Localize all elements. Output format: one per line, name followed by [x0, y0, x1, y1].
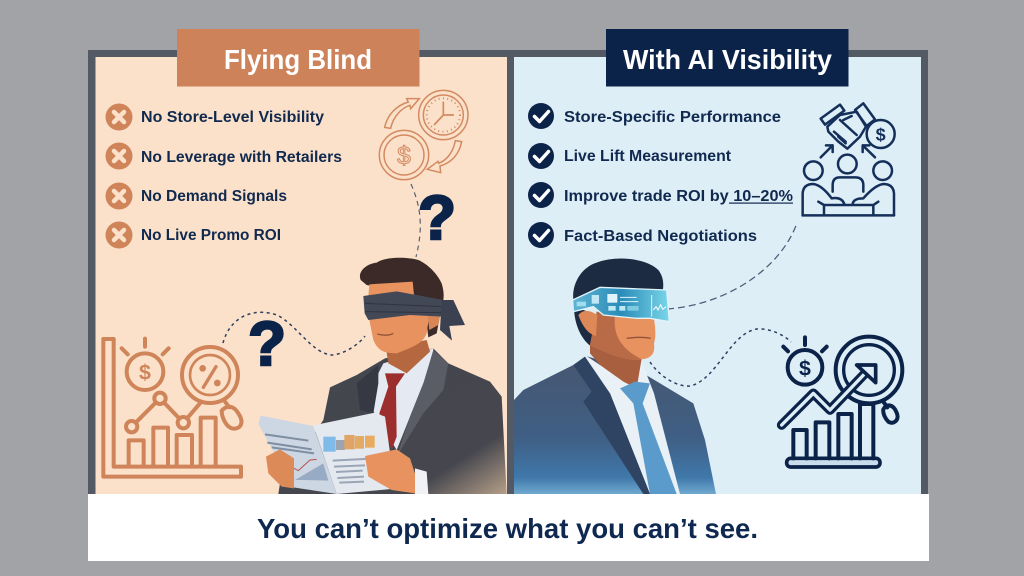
- lapels: [397, 350, 448, 457]
- left checklist: [106, 104, 342, 248]
- item: improve trade ROI: Improve trade ROI by 10–20%: [564, 188, 793, 205]
- item: no demand signals: [106, 182, 287, 210]
- item: live lift measurement: Live Lift Measurement: [564, 148, 732, 165]
- item: fact-based negotiations: [528, 222, 757, 248]
- dotted connector: man to chart: [650, 329, 791, 386]
- right header: [606, 29, 848, 86]
- item: store-specific performance: [528, 103, 781, 129]
- item: live lift measurement: [528, 143, 732, 169]
- icon: growth chart with magnifier: $: [799, 356, 811, 380]
- icon: time and money cycle: [379, 90, 468, 180]
- icon: chart with percent magnifier: $: [139, 360, 151, 384]
- dotted connector: chart to head: [223, 312, 365, 355]
- suit: [514, 356, 716, 494]
- ear: [427, 313, 440, 330]
- suit: [278, 348, 507, 494]
- tie: [620, 382, 677, 494]
- bottom banner: You can’t optimize what you can’t see.: [257, 513, 758, 544]
- item: no store-level visibility: No Store-Level Visibility: [141, 109, 324, 126]
- shirt: [373, 348, 433, 450]
- dashed connector: cycle to head: [411, 184, 420, 257]
- blindfold: [363, 291, 443, 320]
- question mark middle: ?: [248, 310, 286, 379]
- item: no store-level visibility: [106, 104, 324, 130]
- forehead: [368, 282, 414, 297]
- panel: Flying Blind: [96, 29, 507, 494]
- tie: [379, 373, 405, 450]
- item: no demand signals: No Demand Signals: [141, 188, 287, 205]
- item: store-specific performance: Store-Specific Performance: [564, 109, 781, 126]
- right panel background: [514, 57, 921, 494]
- item: improve trade ROI: [528, 182, 793, 208]
- lapel: [573, 357, 650, 494]
- icon: time and money cycle: $: [397, 143, 411, 170]
- item: no live promo ROI: [106, 222, 281, 248]
- shirt: [584, 355, 680, 494]
- dashed connector: visor to team: [667, 223, 797, 309]
- face: [590, 312, 655, 360]
- icon: team and handshake: $: [876, 125, 886, 145]
- illustration: man with AI visor: [514, 259, 716, 494]
- left header: [177, 29, 420, 86]
- hair: [573, 259, 663, 300]
- panel: With AI Visibility: [514, 29, 921, 494]
- icon: team and handshake: [803, 103, 895, 215]
- ear: [578, 311, 597, 336]
- icon: chart with percent magnifier: [103, 339, 241, 477]
- right checklist: [528, 103, 793, 248]
- left panel background: [96, 57, 507, 494]
- item: no leverage with retailers: [106, 142, 342, 170]
- hair: [360, 258, 444, 337]
- item: fact-based negotiations: Fact-Based Negotiations: [564, 228, 757, 245]
- neck: [386, 340, 430, 373]
- right header: With AI Visibility: [623, 44, 832, 75]
- newspaper: [258, 416, 337, 494]
- neck: [590, 343, 642, 388]
- icon: growth chart with magnifier: [782, 337, 902, 467]
- question mark top: ?: [418, 184, 456, 253]
- face: [368, 315, 429, 353]
- bottom banner: [88, 494, 929, 561]
- left header: Flying Blind: [224, 44, 372, 75]
- visor: [573, 287, 669, 322]
- item: no leverage with retailers: No Leverage with Retailers: [141, 149, 342, 166]
- item: no live promo ROI: No Live Promo ROI: [141, 227, 281, 244]
- back hair: [574, 307, 602, 346]
- illustration: blindfolded man: [258, 258, 507, 494]
- frame: [88, 50, 928, 500]
- hands: [266, 449, 294, 488]
